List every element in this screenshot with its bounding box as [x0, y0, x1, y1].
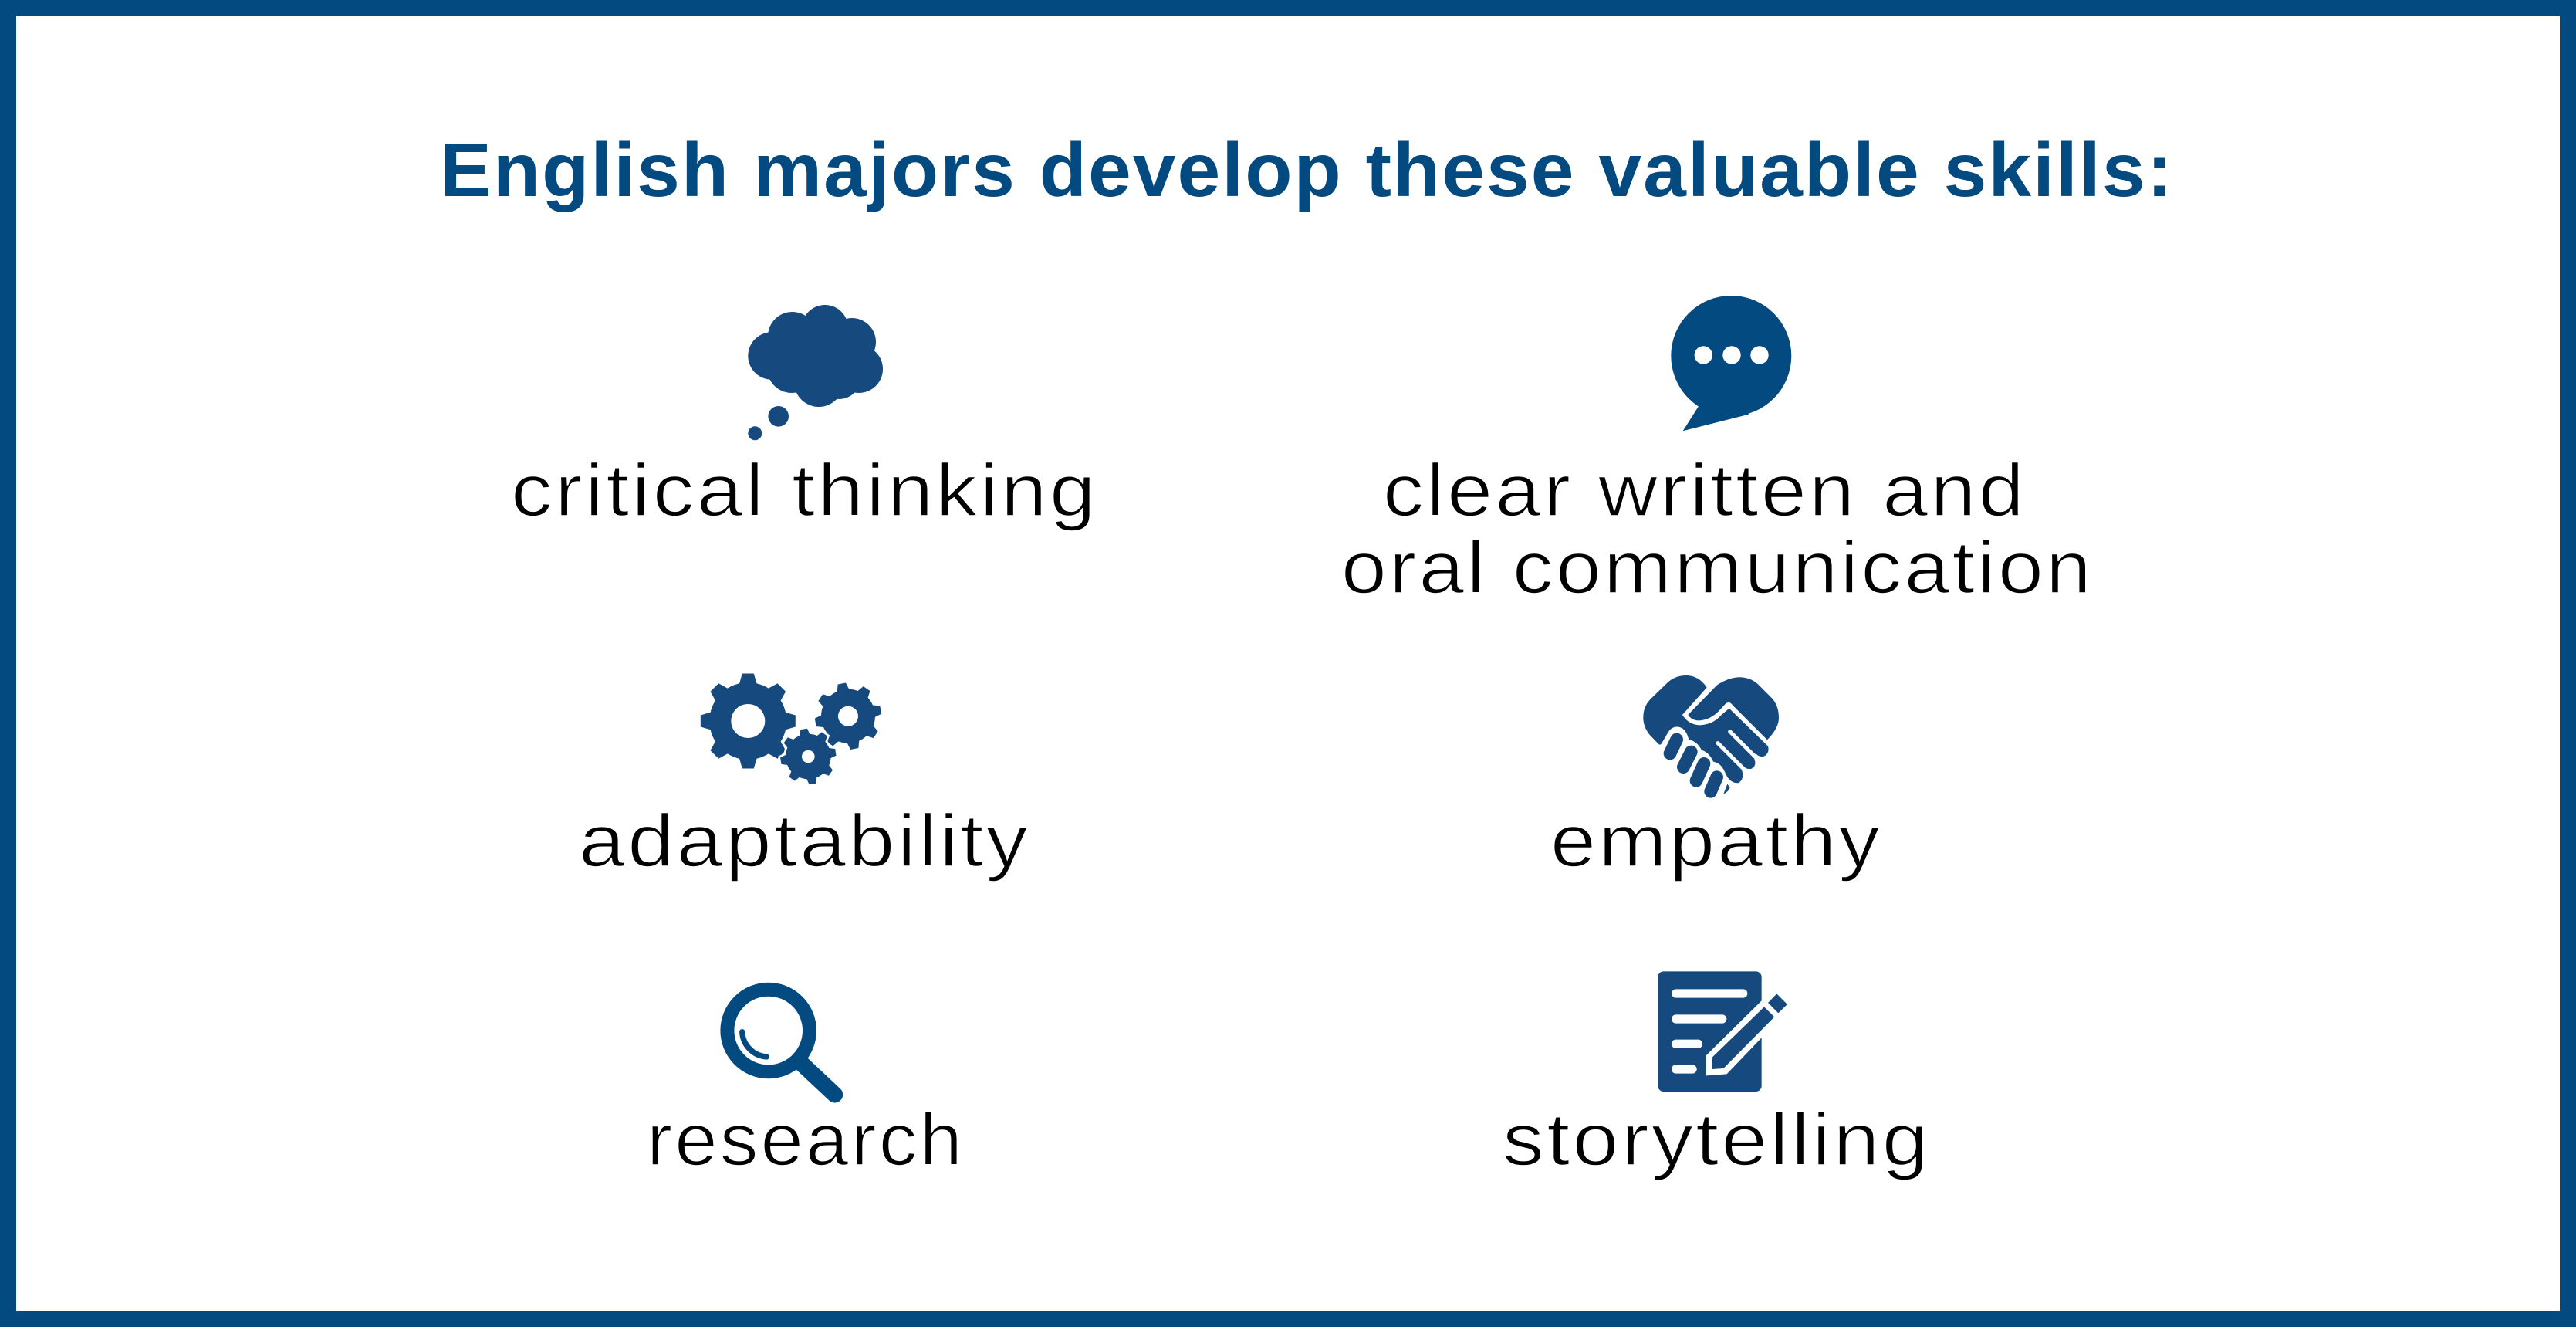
label: empathy: empathy [1550, 800, 1882, 882]
icon: speech bubble [1671, 296, 1791, 431]
label: storytelling: storytelling [1503, 1098, 1931, 1181]
label: clear written and oral communication [1341, 449, 2094, 609]
label: research: research [647, 1098, 965, 1181]
icon: thought cloud [748, 305, 883, 440]
icon: magnifying glass [727, 990, 835, 1095]
icon: document with pencil [1658, 971, 1787, 1092]
icon: handshake heart [1643, 675, 1779, 794]
title: English majors develop these valuable skills: [440, 127, 2174, 212]
label: clear written and oral communication: clear written and [1383, 449, 2027, 532]
label: clear written and oral communication: oral communication [1341, 526, 2094, 609]
label: critical thinking: critical thinking [511, 449, 1098, 532]
icon: gears [701, 673, 887, 788]
label: adaptability: adaptability [579, 800, 1030, 882]
